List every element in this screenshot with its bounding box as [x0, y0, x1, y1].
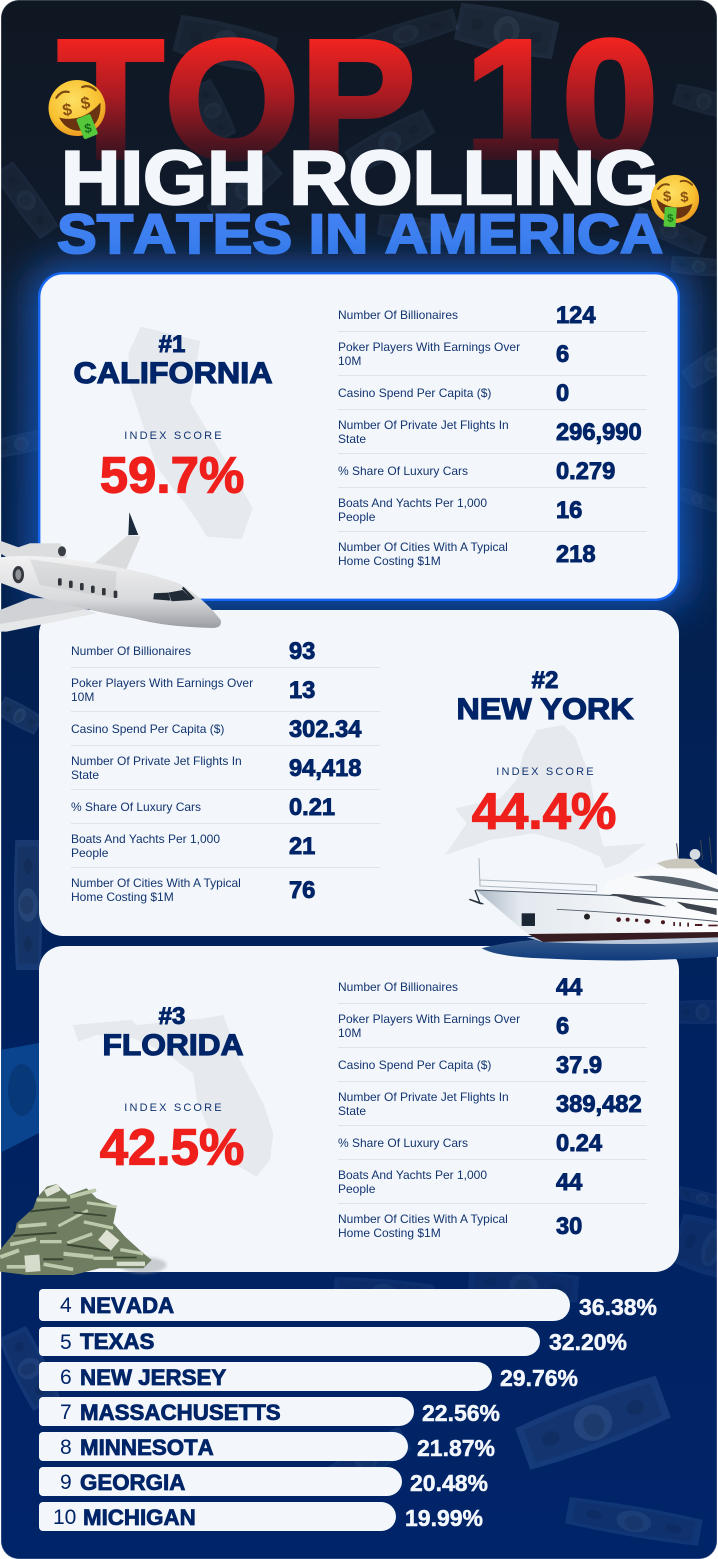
stats table: 10M	[338, 1026, 361, 1040]
stats table: % Share Of Luxury Cars	[338, 464, 468, 478]
stats table: 93	[289, 639, 315, 665]
stats table: Number Of Billionaires	[338, 980, 458, 994]
rank heading: #1	[159, 331, 185, 358]
stats table: State	[338, 432, 366, 446]
stats table: 30	[556, 1214, 582, 1240]
stats table: 0	[556, 381, 569, 407]
stats table: 10M	[71, 690, 94, 704]
index score value: 59.7%	[100, 446, 244, 504]
stats table: 6	[556, 342, 569, 368]
panel: california	[39, 273, 679, 600]
icon: money-mouth emoji left: $	[61, 100, 74, 120]
bar: Massachusetts: 7	[60, 1401, 72, 1424]
stats table: Number Of Cities With A Typical	[338, 540, 508, 554]
bar: Nevada: NEVADA	[80, 1293, 174, 1318]
stats table: Casino Spend Per Capita ($)	[71, 722, 224, 736]
bar: Michigan: MICHIGAN	[83, 1505, 196, 1530]
icon: california state map	[128, 327, 253, 539]
stats table: Number Of Private Jet Flights In	[71, 754, 242, 768]
stats table: People	[338, 510, 376, 524]
bar: Texas: TEXAS	[80, 1329, 154, 1354]
stats table: % Share Of Luxury Cars	[338, 1136, 468, 1150]
stats table: Casino Spend Per Capita ($)	[338, 1058, 491, 1072]
icon: money-mouth emoji right: $	[667, 212, 675, 225]
bar: Nevada: 4	[60, 1294, 72, 1317]
bar: Michigan: 19.99%	[405, 1505, 483, 1531]
bar: Michigan	[39, 1502, 483, 1531]
icon: new york state map	[445, 725, 647, 868]
index score label: INDEX SCORE	[124, 430, 224, 442]
bar: Massachusetts	[39, 1397, 500, 1426]
icon: money-mouth emoji left: $	[79, 93, 92, 113]
index score value: 42.5%	[100, 1118, 244, 1176]
stats table: 0.24	[556, 1131, 603, 1157]
stats table: State	[338, 1104, 366, 1118]
stats table: 0.21	[289, 795, 335, 821]
title line: HIGH ROLLING: HIGH ROLLING	[61, 136, 659, 221]
state name: NEW YORK	[456, 693, 634, 726]
stats table: 21	[289, 834, 315, 860]
bar: Nevada: 36.38%	[579, 1294, 657, 1320]
index score label: INDEX SCORE	[124, 1102, 224, 1114]
stats table: Poker Players With Earnings Over	[338, 340, 520, 354]
bar: New Jersey: 29.76%	[500, 1365, 578, 1391]
title line: TOP 10: TOP 10	[58, 5, 658, 195]
index score label: INDEX SCORE	[496, 766, 596, 778]
bar: New Jersey: 6	[60, 1366, 72, 1389]
stats table: 13	[289, 678, 315, 704]
stats table: Boats And Yachts Per 1,000	[71, 832, 220, 846]
stats table: 44	[556, 975, 583, 1001]
stats table: 76	[289, 878, 315, 904]
stats table: 0.279	[556, 459, 615, 485]
stats table: 10M	[338, 354, 361, 368]
stats table: Home Costing $1M	[338, 1226, 441, 1240]
stats table	[338, 303, 647, 568]
stats table: Number Of Billionaires	[71, 644, 191, 658]
icon: money-mouth emoji right: $	[663, 189, 672, 206]
stats table	[71, 639, 380, 904]
panel glow: california	[30, 265, 690, 607]
stats table: State	[71, 768, 99, 782]
bar: Massachusetts: MASSACHUSETTS	[80, 1400, 281, 1425]
stats table: Poker Players With Earnings Over	[338, 1012, 520, 1026]
icon: pile of cash	[0, 1184, 167, 1275]
bar: Georgia	[39, 1467, 488, 1496]
stats table: 16	[556, 498, 582, 524]
rank heading: #2	[532, 667, 558, 694]
stats table: 302.34	[289, 717, 362, 743]
stats table: 389,482	[556, 1092, 642, 1118]
icon: yacht	[469, 837, 718, 960]
index score value: 44.4%	[472, 782, 616, 840]
icon: money-mouth emoji left	[45, 76, 110, 144]
icon: money-mouth emoji right: $	[680, 190, 689, 206]
stats table: Number Of Cities With A Typical	[338, 1212, 508, 1226]
stats table: 44	[556, 1170, 583, 1196]
bar: Georgia: GEORGIA	[80, 1470, 185, 1495]
bar chart: states ranked 4 to 10	[39, 1289, 657, 1531]
bar: Texas: 32.20%	[549, 1329, 627, 1355]
stats table: 124	[556, 303, 596, 329]
stats table: People	[338, 1182, 376, 1196]
bar: Georgia: 20.48%	[410, 1470, 488, 1496]
bar: Nevada	[39, 1289, 657, 1321]
stats table: 218	[556, 542, 596, 568]
bar: Texas	[39, 1327, 627, 1356]
stats table: Poker Players With Earnings Over	[71, 676, 253, 690]
panel: florida	[39, 946, 679, 1272]
stats table: Number Of Private Jet Flights In	[338, 1090, 509, 1104]
bar: Michigan: 10	[53, 1506, 76, 1529]
stats table: 296,990	[556, 420, 642, 446]
stats table: Casino Spend Per Capita ($)	[338, 386, 491, 400]
stats table: Boats And Yachts Per 1,000	[338, 496, 487, 510]
stats table: Number Of Billionaires	[338, 308, 458, 322]
bar: Minnesota: 8	[60, 1436, 72, 1459]
stats table: Number Of Cities With A Typical	[71, 876, 241, 890]
stats table: 6	[556, 1014, 569, 1040]
title line: STATES IN AMERICA: STATES IN AMERICA	[57, 202, 663, 265]
stats table: 94,418	[289, 756, 361, 782]
panel: new york	[39, 610, 679, 936]
stats table: Home Costing $1M	[71, 890, 174, 904]
bar: Minnesota	[39, 1432, 495, 1461]
stats table: % Share Of Luxury Cars	[71, 800, 201, 814]
bar: Minnesota: MINNESOTA	[80, 1435, 214, 1460]
icon: money-mouth emoji left: $	[83, 120, 93, 136]
stats table	[338, 975, 647, 1240]
icon: florida state map	[73, 1015, 273, 1177]
state name: FLORIDA	[102, 1029, 243, 1062]
stats table: Home Costing $1M	[338, 554, 441, 568]
title	[57, 5, 663, 265]
bar: New Jersey	[39, 1362, 578, 1391]
rank heading: #3	[159, 1003, 185, 1030]
stats table: People	[71, 846, 109, 860]
bar: Georgia: 9	[60, 1471, 72, 1494]
stats table: 37.9	[556, 1053, 602, 1079]
bar: Massachusetts: 22.56%	[422, 1400, 500, 1426]
bar: Minnesota: 21.87%	[417, 1435, 495, 1461]
icon: private jet	[0, 512, 221, 632]
bar: New Jersey: NEW JERSEY	[80, 1365, 226, 1390]
stats table: Number Of Private Jet Flights In	[338, 418, 509, 432]
stats table: Boats And Yachts Per 1,000	[338, 1168, 487, 1182]
icon: money-mouth emoji right	[649, 173, 701, 229]
state name: CALIFORNIA	[74, 357, 272, 390]
bar: Texas: 5	[60, 1331, 72, 1354]
